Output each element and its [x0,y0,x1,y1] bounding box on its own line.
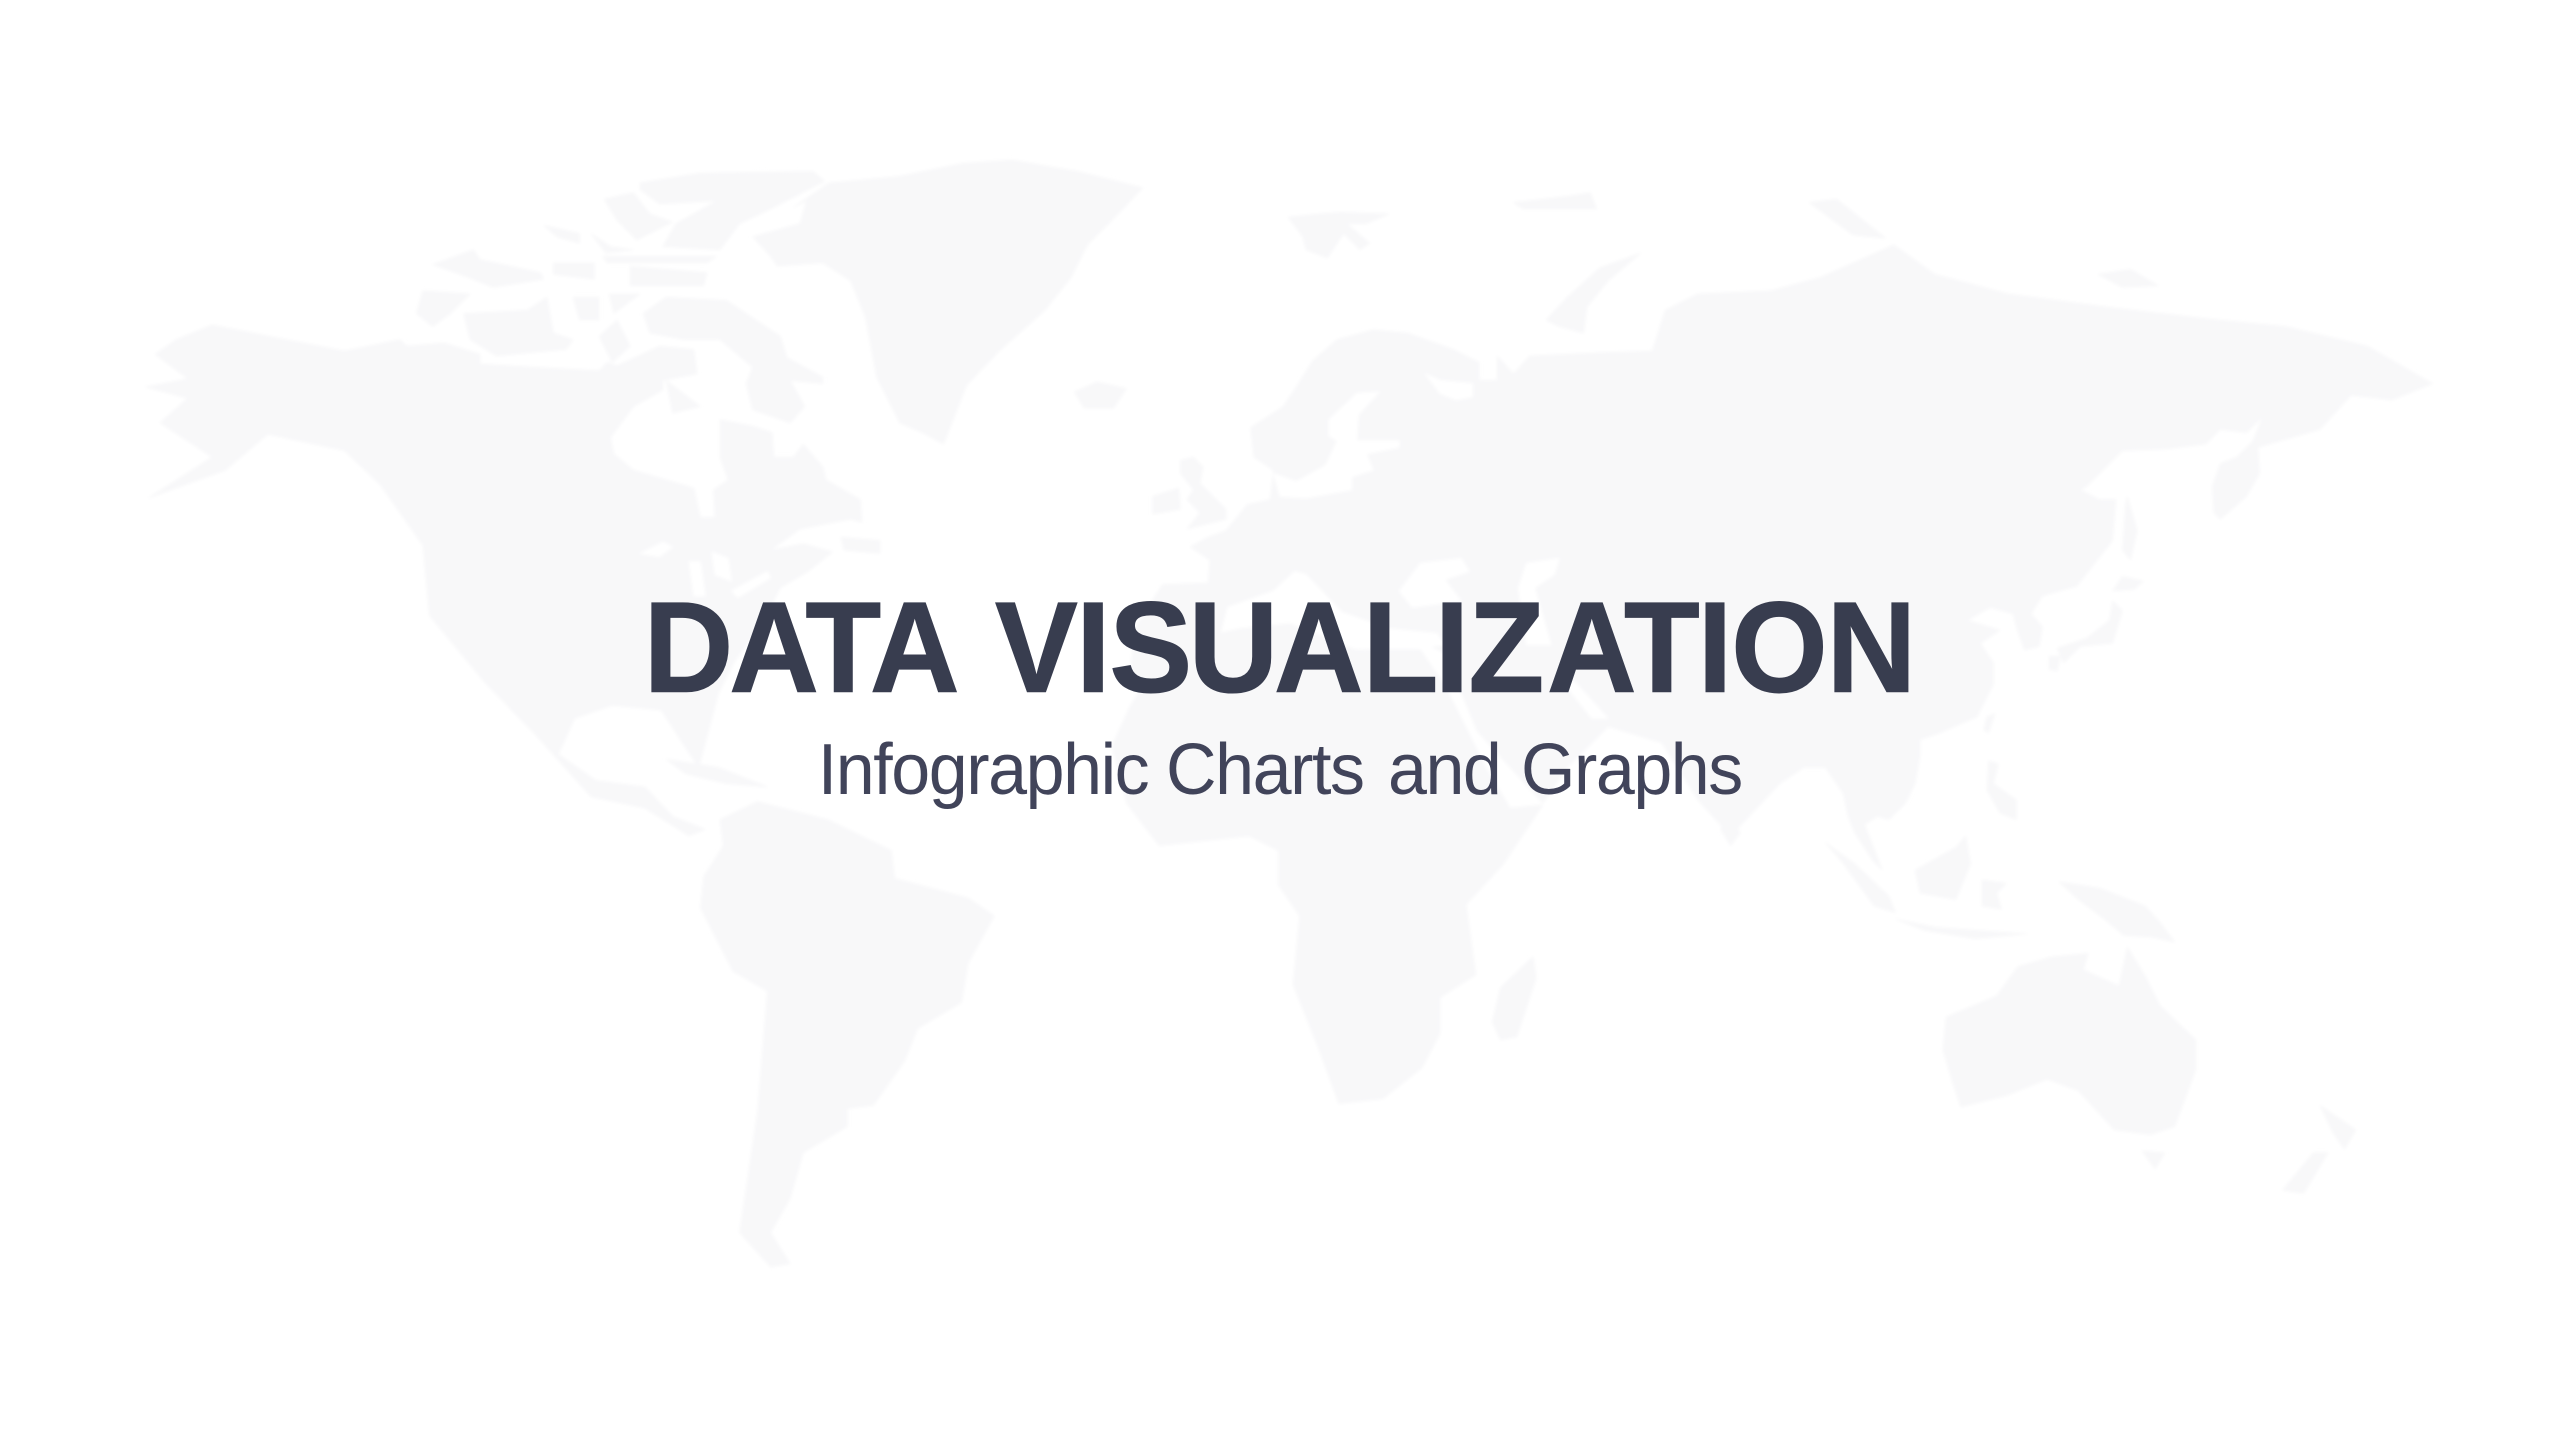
map: Eurasia [1130,245,2433,870]
map: Java and Lesser Sunda [1896,919,2028,939]
map: Sumatra [1825,842,1896,913]
map: Iceland [1074,382,1127,408]
map: Australia [1943,947,2196,1135]
map: Ireland [1153,488,1180,514]
map: Japan [2049,576,2144,671]
map: Franz Josef Land [1513,193,1597,209]
map: Novaya Zemlya [1546,253,1641,333]
map: Philippines [1987,761,2016,820]
subtitle: and [1388,729,1500,810]
map: inland seas [1216,374,1608,800]
map: Svalbard [1288,212,1389,258]
map: Africa [1112,624,1543,1104]
map: South America [700,802,994,1267]
subtitle: Infographic [818,729,1148,810]
map: Great Britain [1180,457,1226,529]
map: Cuba and Caribbean [666,759,767,787]
map: Sri Lanka [1721,813,1740,846]
map: Sakhalin [2122,496,2137,560]
title: DATA VISUALIZATION [644,574,1916,719]
map: Severnaya Zemlya [1809,199,1886,238]
map: North America [145,325,862,836]
map: Newfoundland [841,537,880,553]
map: New Zealand [2282,1105,2356,1193]
map: New Guinea [2059,882,2175,942]
subtitle: Graphs [1521,729,1742,810]
map: Borneo [1915,836,1971,900]
map: Tasmania [2142,1151,2165,1169]
map: Taiwan [1984,713,1995,733]
map: Great Lakes [640,542,771,598]
subtitle: Charts [1166,729,1364,810]
world map background [145,160,2433,1267]
map: Greenland [753,160,1143,444]
map: Madagascar [1492,957,1536,1040]
map: Canadian Arctic islands [416,171,824,423]
map: New Siberian Islands [2098,269,2158,287]
map: Sulawesi [1982,880,2007,909]
